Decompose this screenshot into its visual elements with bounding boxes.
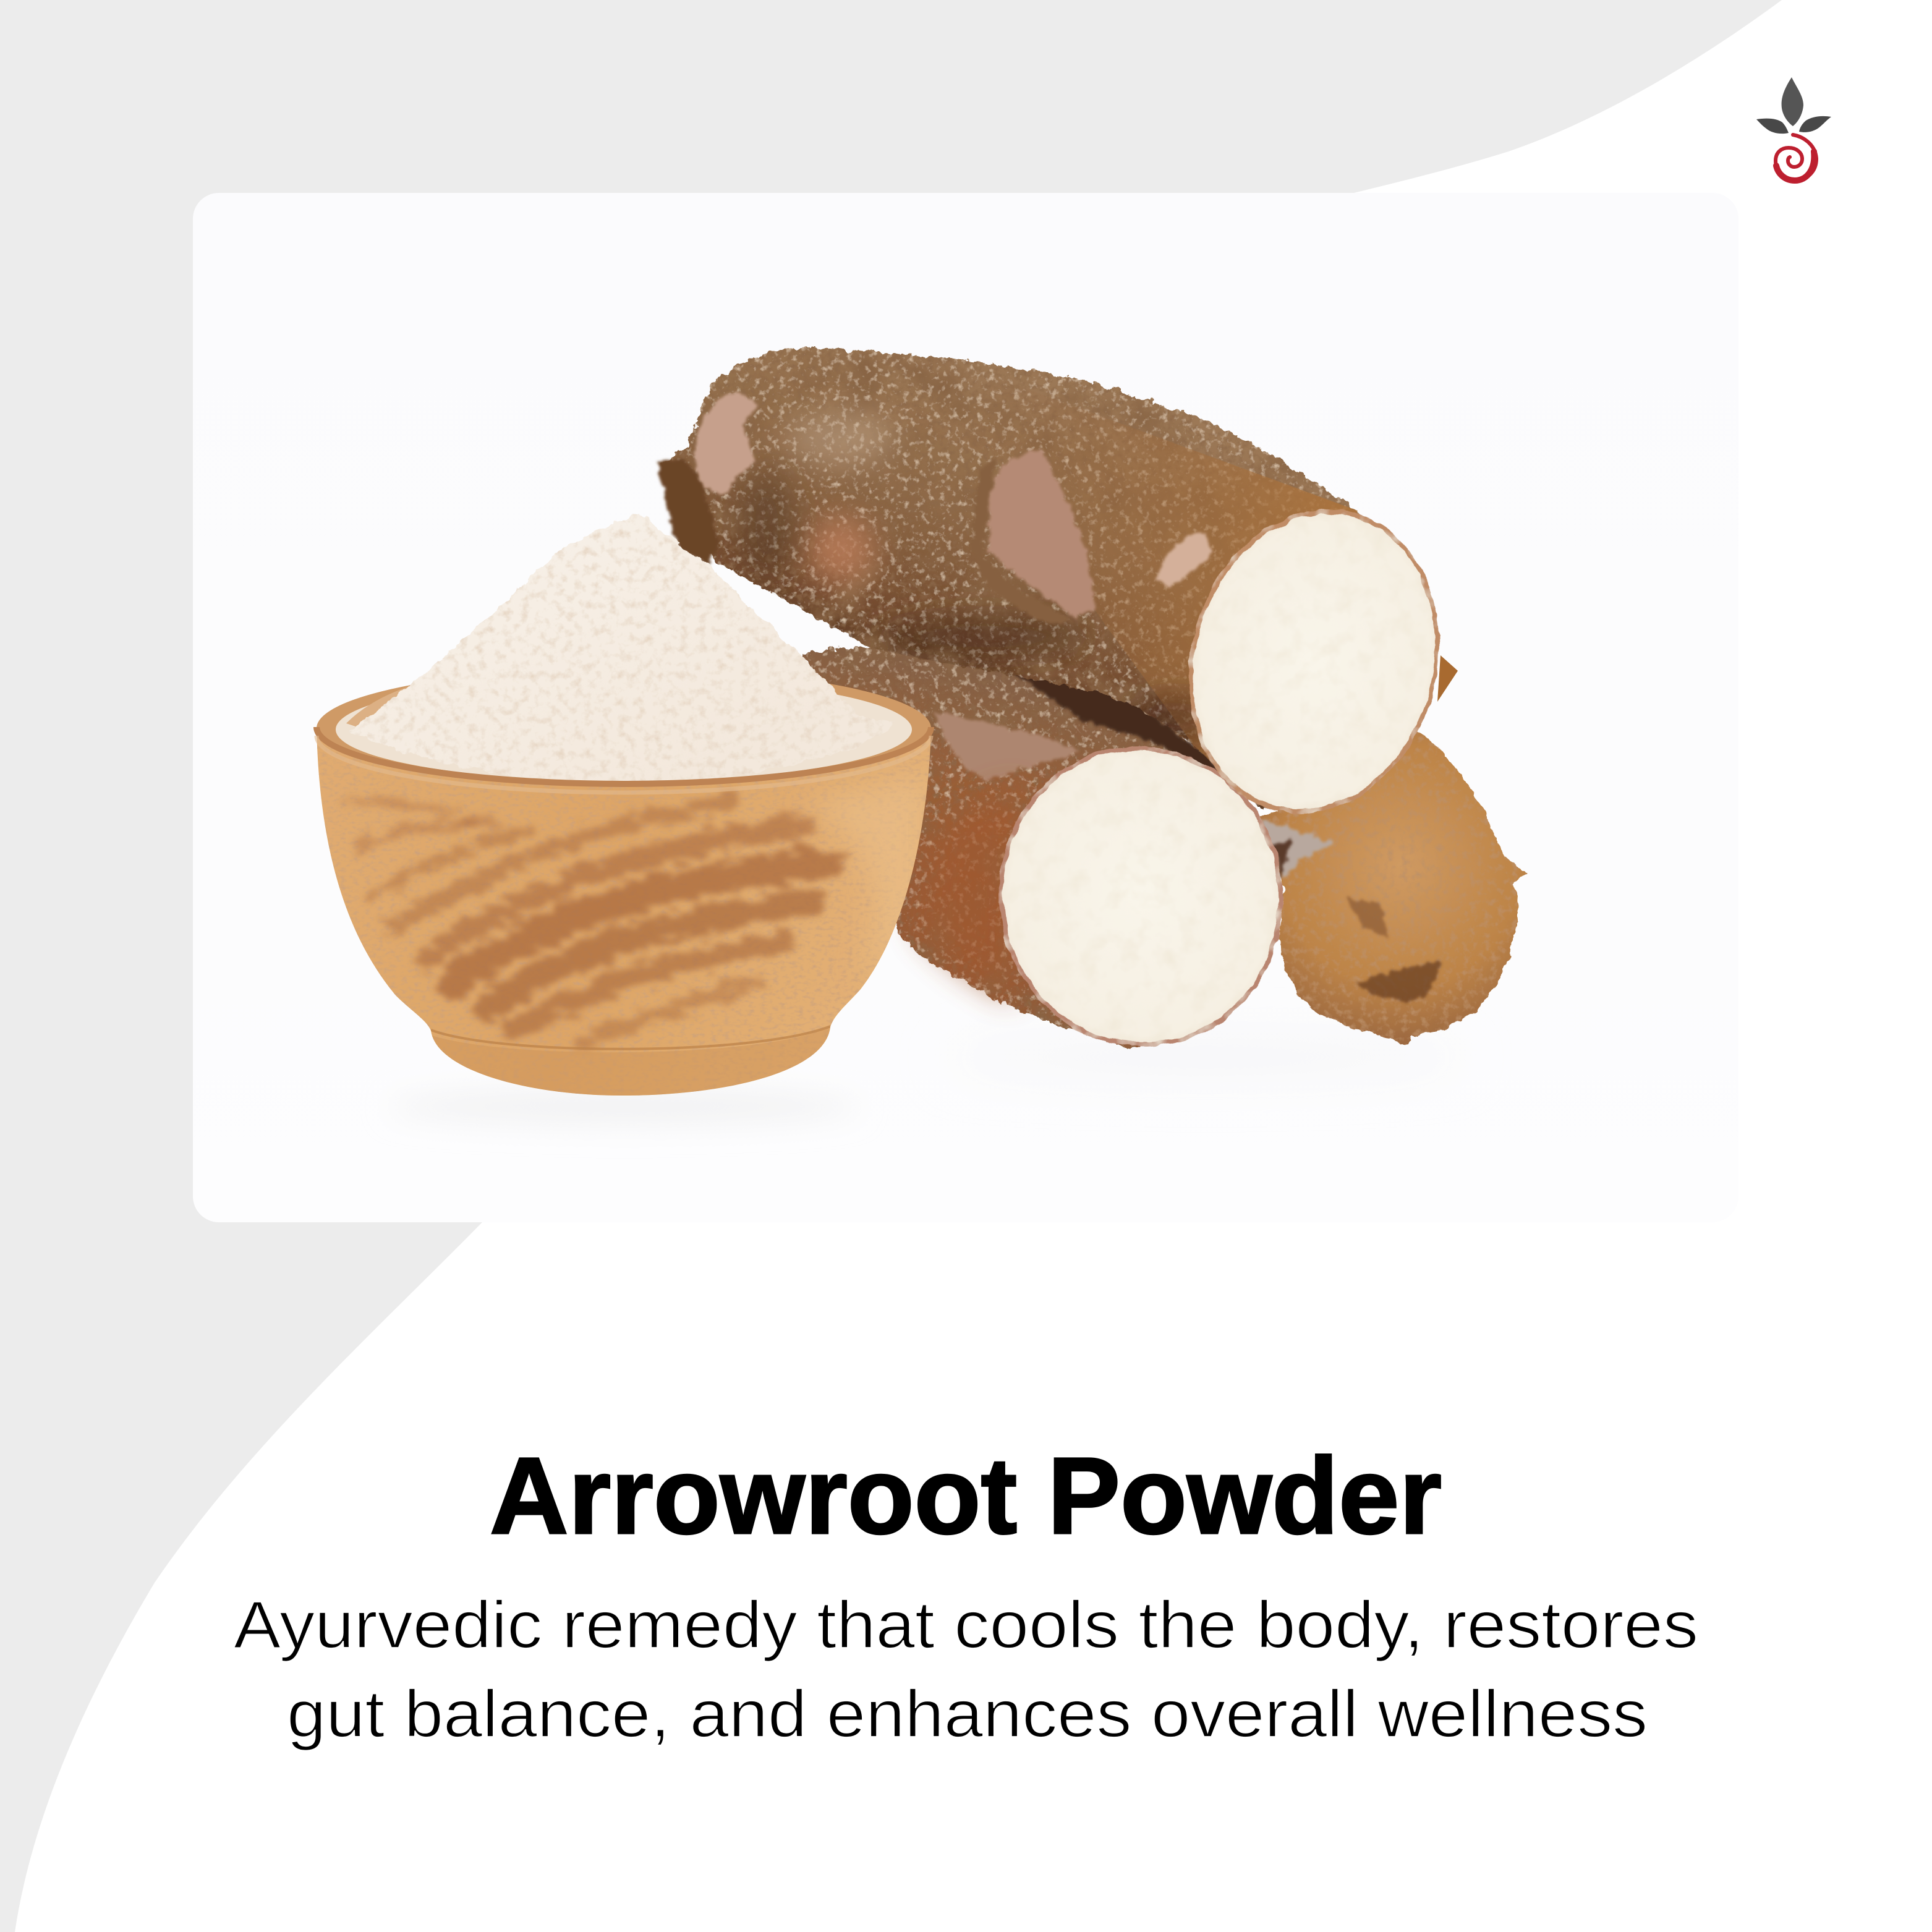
- description text: [234, 1587, 1698, 1751]
- bowl of powder: [317, 514, 931, 1100]
- powder heap: [349, 514, 895, 783]
- bowl body: [317, 727, 931, 1096]
- logo: leaves and red spiral: [1756, 77, 1831, 181]
- root: right whole root: [1259, 729, 1526, 1044]
- bark crack around centre patch: [971, 454, 1076, 624]
- bowl inner: [336, 678, 912, 781]
- root: middle cut root: [804, 648, 1300, 1063]
- floor shadows: [389, 1041, 1465, 1123]
- logo right leaf: [1799, 116, 1831, 132]
- gap under top root: [1261, 819, 1334, 878]
- photo background card: [193, 193, 1738, 1222]
- pink flap on middle root: [934, 711, 1079, 780]
- root end knot: [1357, 961, 1440, 1000]
- root tip flap: [657, 459, 720, 564]
- logo spiral: [1776, 135, 1816, 181]
- cut face of middle root: [982, 730, 1300, 1063]
- logo left leaf: [1756, 119, 1789, 134]
- cut face of top root: [1158, 484, 1470, 839]
- bark patch: small: [1157, 532, 1212, 587]
- panel: product photo: [193, 193, 1527, 1222]
- title: Arrowroot Powder: [490, 1436, 1442, 1557]
- logo top leaf: [1782, 77, 1803, 126]
- bark patch: left flap: [694, 391, 757, 495]
- description line 2: gut balance, and enhances overall wellness: [287, 1676, 1648, 1751]
- bowl rim front: [317, 727, 931, 784]
- wood grain: [344, 773, 927, 1100]
- bowl rim back: [317, 668, 931, 788]
- dark gap between roots: [1002, 665, 1236, 798]
- orange bark: [915, 785, 1020, 1002]
- bark patch: centre: [989, 450, 1096, 618]
- root: top cut root: [657, 347, 1470, 839]
- description line 1: Ayurvedic remedy that cools the body, restores: [234, 1587, 1698, 1662]
